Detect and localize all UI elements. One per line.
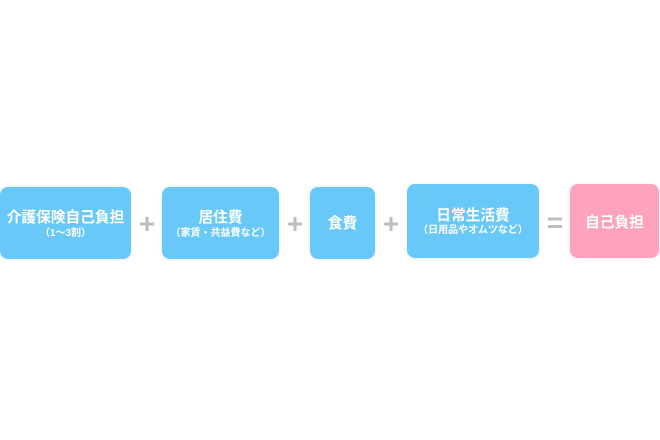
operator: plus: + [383,208,399,239]
note: 10 to 30 percent: （1～3割） [40,228,91,239]
heading: housing costs: 居住費 [198,210,243,226]
heading: total self-pay: 自己負担 [585,215,644,231]
operator: equals: = [547,207,563,238]
heading: care insurance copay: 介護保険自己負担 [7,210,124,226]
note: daily goods and diapers: （日用品やオムツなど） [418,225,528,236]
heading: daily living costs: 日常生活費 [436,208,510,224]
heading: meal costs: 食費 [328,216,357,232]
box: meal costs [310,187,375,259]
box: daily living costs [407,184,539,258]
box: long-term care insurance copay [0,187,131,259]
note: rent and utilities: （家賃・共益費など） [170,228,270,239]
operator: plus: + [139,208,155,239]
box: total self-pay [570,184,659,258]
box: housing costs [162,187,279,259]
operator: plus: + [287,208,303,239]
